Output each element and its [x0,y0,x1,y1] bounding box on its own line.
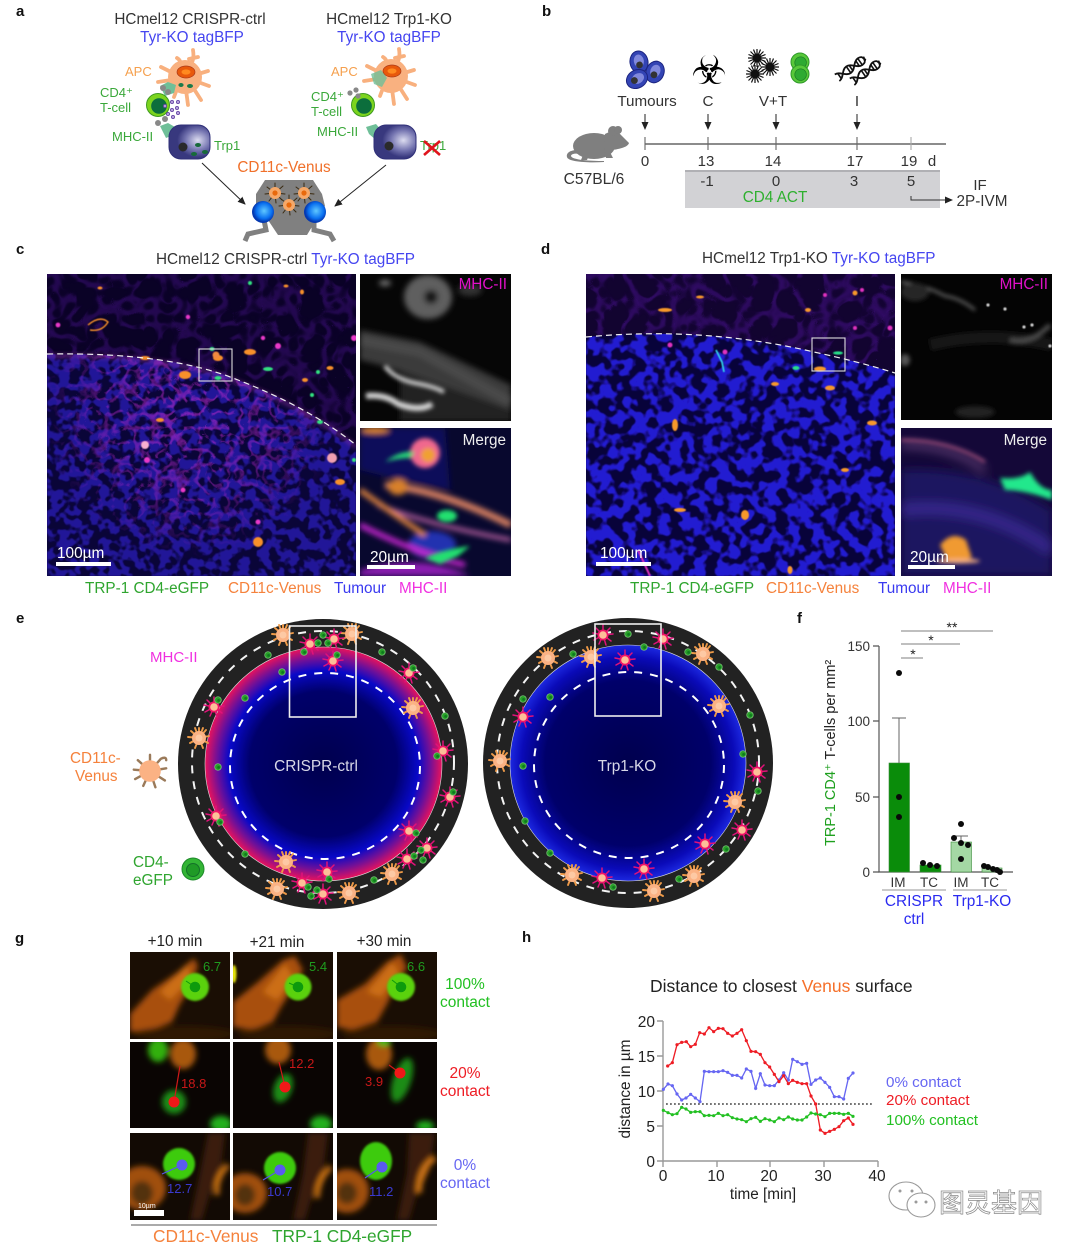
tile row 3 column 2 [233,1133,333,1220]
panel b: treatment timeline [542,3,1008,210]
timeline day numbers: 13 [698,153,714,170]
legend: 20% contact [886,1092,970,1109]
timeline day numbers: 19 [901,153,917,170]
label C57BL/6: C57BL/6 [564,171,624,188]
tile row 2 column 3 [337,1042,437,1128]
divider and channel legend: TRP-1 CD4-eGFP [272,1226,412,1246]
watermark [889,1182,1043,1218]
heading: Tyr-KO tagBFP right: Tyr-KO tagBFP [337,29,441,46]
tile row 2 column 2 [233,1042,333,1128]
label APC left: APC [125,64,152,79]
x axis numbers: 10 [707,1168,725,1185]
y axis numbers: 10 [638,1084,655,1101]
y axis numbers: 15 [638,1049,655,1066]
antigen presenting cells [188,624,423,903]
arrow right to mouse [335,165,386,206]
inset: merge [360,428,511,576]
scale bar 100 µm: 100µm [600,545,647,562]
y axis title: TRP-1 CD4⁺ T-cells per mm² [823,660,839,846]
label CD11c-Venus: CD11c- [70,750,121,767]
main micrograph [47,274,356,576]
label IF: IF [973,177,987,194]
x axis title: time [min] [730,1186,796,1203]
icon: tumour cells [623,50,667,92]
x axis numbers: 30 [814,1168,832,1185]
timeline axis [645,137,946,150]
channel legend: MHC-II [399,580,447,597]
timeline day numbers [641,153,936,170]
time headers [148,933,411,951]
label 0% contact: 0% [454,1157,476,1174]
legend: 0% contact [886,1074,962,1091]
CD4 T cells [520,631,761,890]
dashed tumour margin [586,334,895,373]
label CD4 T-cell left: T-cell [100,100,131,115]
channel legend: Tumour [334,580,386,597]
group label CRISPR ctrl: CRISPR [885,893,943,910]
label C: C [703,93,714,110]
tile row 1 column 3 [337,952,437,1039]
icon: T-cell right [352,94,374,116]
icon: tumour cell left [169,125,210,159]
dashed tumour margin [47,354,356,445]
zoom rectangle [290,626,356,717]
icon: biohazard: ☣ [691,48,727,94]
arrow left to mouse [202,163,245,204]
y axis numbers [847,639,870,880]
MHC-II positive cells [513,625,767,888]
x categories: IM [890,875,906,890]
x axis numbers [659,1168,886,1185]
tile row 2 column 2: 12.2 [289,1056,314,1071]
group label CRISPR ctrl: ctrl [904,911,924,928]
ACT day numbers: 5 [907,173,915,190]
label V+T: V+T [759,93,787,110]
label Tumours: Tumours [617,93,677,110]
inset label Merge: Merge [1004,432,1047,449]
significance brackets: * [928,632,934,648]
tile row 1 column 2 [233,952,333,1039]
group separators [882,889,1007,891]
ACT day numbers: 3 [850,173,858,190]
channel legend: CD11c-Venus [228,580,322,597]
heading: CRISPR-ctrl tumour: HCmel12 CRISPR-ctrl [114,11,266,28]
tile row 1 column 3: 6.6 [407,959,425,974]
tile row 3 column 3: 11.2 [369,1184,393,1199]
label I: I [855,93,859,110]
time headers: +30 min [357,933,411,950]
label 100% contact: 100% [445,976,485,993]
chart title: Distance to closest Venus surface [650,976,913,996]
bars [889,763,1002,872]
tile row 3 column 1: 12.7 [167,1181,192,1196]
icon: tumour cell right [366,124,416,159]
time headers: +10 min [148,933,202,950]
tile row 2 column 1 [130,1042,230,1128]
schematic: CRISPR-ctrl tumour [178,619,468,909]
icon: CD4 cell legend [182,858,204,880]
icon: contact complex left [155,82,176,138]
tile row 3 column 2: 10.7 [267,1184,292,1199]
icon: mouse with tumours [245,180,334,241]
axes [873,646,1013,872]
label 100% contact: contact [440,994,491,1011]
label 2P-IVM: 2P-IVM [956,193,1008,210]
main micrograph [586,274,895,576]
channel legend: TRP-1 CD4-eGFP [85,580,209,597]
x axis numbers: 40 [868,1168,886,1185]
x categories: TC [981,875,999,890]
arrows to timeline [645,114,857,129]
panel letter c: c [16,241,24,258]
legend: 100% contact [886,1112,979,1129]
inset label MHC-II: MHC-II [1000,276,1048,293]
scale bar 100 µm [56,545,111,566]
panel letter b: b [542,3,551,20]
scale bar 20 µm: 20µm [910,549,949,566]
x axis numbers: 20 [760,1168,778,1185]
panel g: intravital stills [15,930,491,1246]
icon: cytokine dots [164,100,180,118]
label MHC-II left: MHC-II [112,129,153,144]
x axis numbers: 0 [659,1168,668,1185]
label 20% contact: 20% [449,1065,481,1082]
inset box [812,338,845,371]
icon: chat bubbles [889,1182,935,1217]
tile row 3 column 3 [337,1133,437,1220]
label CRISPR-ctrl: CRISPR-ctrl [274,758,358,775]
y axis numbers: 150 [847,639,870,654]
timeline day numbers: d [928,153,936,170]
icon: mouse [567,126,629,162]
x categories: TC [920,875,938,890]
label CD4 T-cell right: CD4⁺ [311,89,344,104]
scale bar 100 µm: 100µm [57,545,104,562]
data points [896,670,1003,875]
label 20% contact: contact [440,1083,491,1100]
panel letter d: d [541,241,550,258]
x categories: IM [954,875,968,890]
timeline day numbers: 17 [847,153,863,170]
label Trp1-KO: Trp1-KO [598,758,656,775]
MHC-II positive cells [204,629,460,904]
channel legend: TRP-1 CD4-eGFP [630,580,754,597]
panel c: CRISPR-ctrl microscopy [16,241,511,597]
ACT window shading [685,170,940,208]
inset: MHC-II greyscale [901,274,1052,420]
label MHC-II: MHC-II [150,649,198,666]
icon: CD11c cell legend [134,755,166,787]
significance brackets [901,619,993,662]
CD4 T cells [215,632,456,899]
y axis title: distance in µm [617,1040,634,1138]
y axis numbers: 20 [638,1014,655,1031]
heading: Trp1-KO tumour: HCmel12 Trp1-KO [326,11,452,28]
channel legend: Tumour [878,580,930,597]
ACT day numbers [700,173,915,190]
channel legend: MHC-II [943,580,991,597]
panel a: experimental cell model [16,3,452,241]
label CD4 ACT: CD4 ACT [743,189,807,206]
scale bar 100 µm [596,545,651,566]
icon: TCR right [347,87,361,99]
divider and channel legend: CD11c-Venus [153,1226,258,1246]
label CD11c-Venus: Venus [75,768,118,785]
schematic: Trp1-KO tumour [483,618,773,908]
legend [886,1074,979,1129]
tile row 2 column 3: 3.9 [365,1074,383,1089]
tile row 1 column 1: 6.7 [203,959,221,974]
panel f: bar chart [797,610,1013,928]
label CD11c-Venus: CD11c-Venus [237,159,331,176]
heading: HCmel12 Trp1-KO Tyr-KO tagBFP [702,250,936,267]
timeline day numbers: 14 [765,153,781,170]
ACT day numbers: 0 [772,173,780,190]
antigen presenting cells [489,644,745,901]
tile row 3 column 1 [130,1133,230,1220]
label 0% contact: contact [440,1175,491,1192]
y axis numbers: 0 [646,1154,655,1171]
inset: merge [901,428,1052,576]
x categories [890,875,999,890]
panel letter h: h [522,929,531,946]
label CD4-eGFP: CD4- [133,854,169,871]
y axis numbers [638,1014,655,1171]
scale bar 20 µm [367,549,415,569]
divider and channel legend [131,1225,437,1246]
timeline day numbers: 0 [641,153,649,170]
label CD4 T-cell right: T-cell [311,104,342,119]
y axis numbers: 100 [847,714,870,729]
icon: T cells [791,53,809,83]
y axis numbers: 0 [862,865,870,880]
icon: virus particles [746,49,779,83]
inset box [199,349,232,381]
threshold line [666,1103,873,1105]
panel letter g: g [15,930,24,947]
icon: T-cell left [146,94,170,116]
icon: antigen presenting cell left [158,50,209,105]
heading: Tyr-KO tagBFP left: Tyr-KO tagBFP [140,29,244,46]
label CD4-eGFP: eGFP [133,872,173,889]
panel e: tumour schematics [16,610,773,909]
arrow to imaging [911,196,952,200]
panel d: Trp1-KO microscopy [541,241,1052,597]
line: 100% contact [663,1107,853,1122]
tile row 3 column 1: 10µm [138,1203,156,1210]
time headers: +21 min [250,934,304,951]
y axis numbers: 50 [855,790,870,805]
zoom rectangle [595,624,661,716]
panel letter f: f [797,610,803,627]
ACT day numbers: -1 [700,173,714,190]
icon: DNA helices [835,55,882,85]
label CD4 T-cell left: CD4⁺ [100,85,133,100]
watermark text: 图灵基因 [939,1188,1043,1218]
error bars [892,718,968,842]
y axis numbers: 5 [646,1119,655,1136]
label crossed out Trp1: Trp1 [420,138,446,153]
scale bar 20 µm: 20µm [370,549,409,566]
line: 0% contact [663,1059,853,1102]
tile row 2 column 1: 18.8 [181,1076,206,1091]
channel legend: CD11c-Venus [766,580,860,597]
significance brackets: * [910,646,916,662]
axes [657,1021,878,1167]
line: 20% contact [668,1028,853,1133]
label Trp1: Trp1 [214,138,240,153]
tile row 1 column 1 [130,952,230,1039]
panel h: distance line chart [522,929,979,1203]
heading: HCmel12 CRISPR-ctrl Tyr-KO tagBFP [156,251,415,268]
label MHC-II right: MHC-II [317,124,358,139]
inset label MHC-II: MHC-II [459,276,507,293]
group label Trp1-KO: Trp1-KO [953,893,1011,910]
inset label Merge: Merge [463,432,506,449]
panel letter e: e [16,610,24,627]
tile row 1 column 2: 5.4 [309,959,327,974]
panel letter a: a [16,3,25,20]
inset: MHC-II greyscale [360,274,511,421]
significance brackets: ** [947,619,958,635]
icon: antigen presenting cell right [364,49,415,104]
label APC right: APC [331,64,358,79]
